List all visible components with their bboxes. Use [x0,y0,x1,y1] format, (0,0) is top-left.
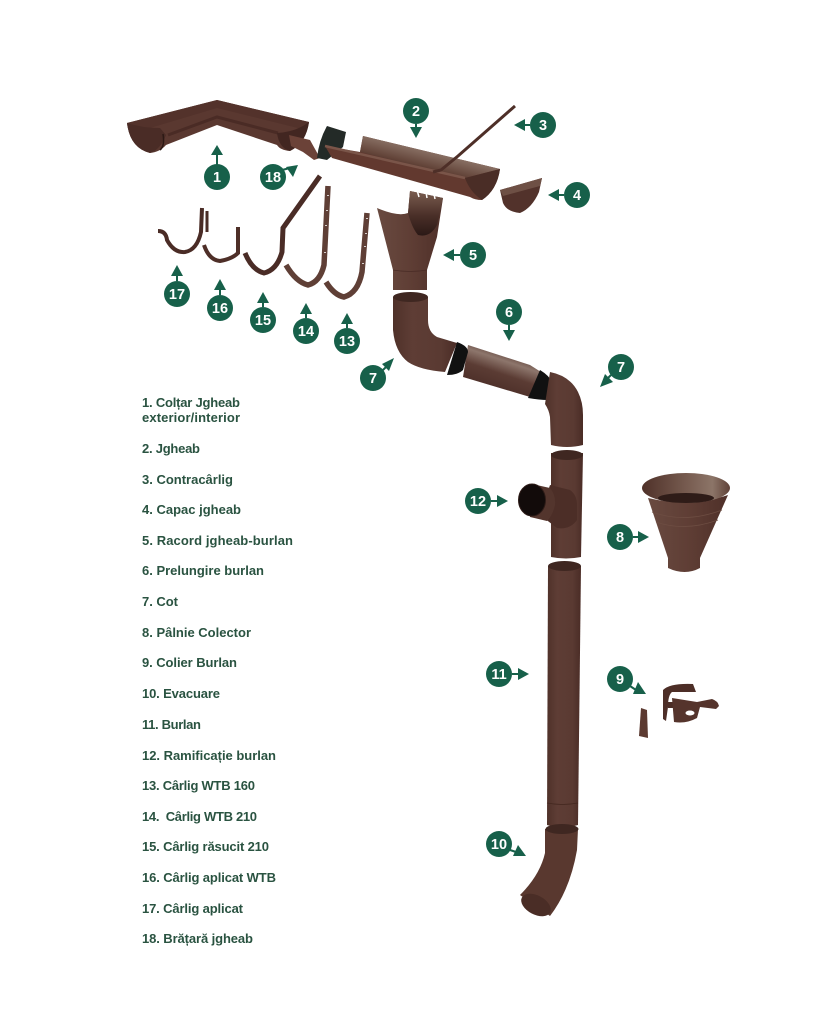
badge 15: 15 [255,313,271,329]
badge 15 [250,292,276,333]
badge 6: 6 [505,305,513,321]
parts legend: 8. Pâlnie Colector [142,625,251,640]
funnel collector [642,473,730,572]
hook 13 [326,213,367,297]
downpipe branch [518,450,583,558]
badge 13 [334,313,360,354]
parts legend: 9. Colier Burlan [142,655,237,670]
parts legend: 5. Racord jgheab-burlan [142,533,293,548]
counter hook 3 [433,106,515,172]
badge 2: 2 [412,104,420,120]
badge 17 [164,265,190,307]
badge 14 [293,303,319,344]
badge 7 left: 7 [369,371,377,387]
parts legend: 13. Cârlig WTB 160 [142,778,255,793]
parts legend: 14. Cârlig WTB 210 [142,809,257,824]
badge 12: 12 [470,494,486,510]
gutter end cap [500,178,542,213]
parts legend: 6. Prelungire burlan [142,563,264,578]
badge 6 [496,299,522,341]
hook 17 [158,208,207,252]
badge 7 right [600,354,634,387]
parts legend: 3. Contracârlig [142,472,233,487]
badge 13: 13 [339,334,355,350]
parts legend: 2. Jgheab [142,441,200,456]
badge 9: 9 [616,672,624,688]
badge 5 [443,242,486,268]
parts legend: 11. Burlan [142,717,201,732]
pipe collar [663,684,719,722]
badge 18: 18 [265,170,281,186]
badge 8: 8 [616,530,624,546]
badge 11: 11 [491,667,507,683]
badge 2 [403,98,429,138]
badge 10: 10 [491,837,507,853]
gutter [325,136,500,200]
badge 1 [204,145,230,190]
badge 11 [486,661,529,687]
badge 1: 1 [213,170,221,186]
badge 16 [207,279,233,321]
downpipe [547,561,581,828]
badge 4 [548,182,590,208]
badge 7 right: 7 [617,360,625,376]
badge 17: 17 [169,287,185,303]
parts legend: 7. Cot [142,594,179,609]
hook 14 [286,186,328,285]
badge 12 [465,488,508,514]
badge 10 [486,831,526,857]
parts legend: 1. Colțar Jgheab [142,395,240,410]
collar wedge [639,708,648,738]
parts legend: 18. Brățară jgheab [142,931,253,946]
bracket 18 and rubber seal [289,126,346,160]
parts legend: 15. Cârlig răsucit 210 [142,839,269,854]
badge 3: 3 [539,118,547,134]
parts legend: 10. Evacuare [142,686,220,701]
badge 14: 14 [298,324,314,340]
lower elbow [545,372,583,447]
badge 5: 5 [469,248,477,264]
badge 7 left [360,358,394,391]
badge 8 [607,524,649,550]
parts legend: 4. Capac jgheab [142,502,241,517]
parts legend: 12. Ramificație burlan [142,748,276,763]
badge 4: 4 [573,188,581,204]
parts legend: 16. Cârlig aplicat WTB [142,870,276,885]
hook 16 [204,227,238,261]
outlet elbow [517,824,578,921]
badge 18 [260,164,298,190]
upper elbow [393,292,457,372]
parts legend: 17. Cârlig aplicat [142,901,244,916]
badge 3 [514,112,556,138]
hook 15 [245,176,320,273]
gutter corner piece [127,100,309,153]
downpipe extension with seals [447,342,553,400]
parts legend [142,395,293,946]
parts legend: exterior/interior [142,410,240,425]
badge 16: 16 [212,301,228,317]
gutter to downpipe connector [377,190,443,290]
badge 9 [607,666,646,694]
